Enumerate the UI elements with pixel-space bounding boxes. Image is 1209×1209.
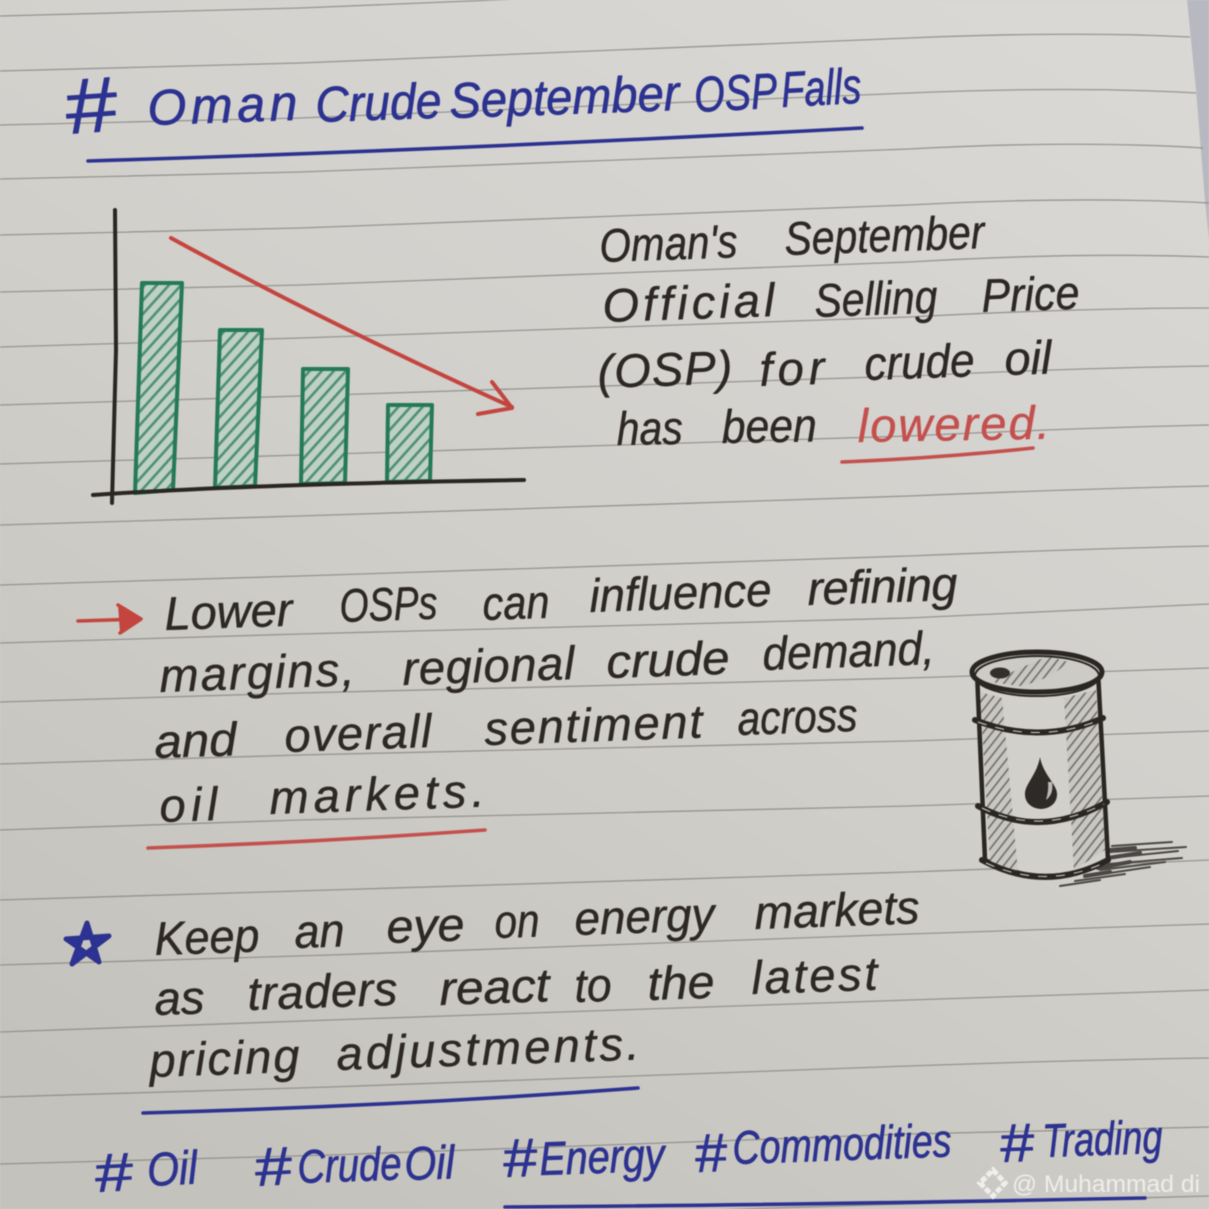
red underline: oil markets [148, 830, 485, 848]
blue underline: pricing adjustments [143, 1088, 638, 1113]
text block: OSP lowered: (OSP) [596, 340, 733, 398]
hashtags: # [501, 1128, 538, 1189]
hashtags: # [693, 1123, 728, 1184]
text block: keep an eye: to [573, 958, 612, 1012]
title: Oman [146, 75, 298, 136]
bar chart: falling price [93, 210, 524, 503]
text block: OSP lowered: been [721, 398, 817, 453]
text block: OSP lowered: Selling [813, 270, 938, 327]
title: OSP [693, 63, 779, 123]
text block: OSP lowered [596, 205, 1080, 455]
text block: OSP lowered: oil [1003, 330, 1054, 385]
barrel shadow [1060, 842, 1186, 886]
text block: keep an eye: on [493, 893, 540, 948]
text block: market influence: across [736, 688, 858, 745]
bar 3 [301, 369, 348, 484]
bar 1 [135, 283, 182, 493]
text block: market influence: crude [605, 631, 730, 688]
trend arrow [171, 238, 512, 414]
text block: keep an eye: energy [573, 887, 718, 945]
text block: keep an eye: pricing [147, 1029, 300, 1087]
hashtags: # [998, 1113, 1035, 1174]
text block: keep an eye: traders [246, 962, 398, 1020]
text block: keep an eye: the [646, 955, 715, 1010]
hashtags: # [92, 1142, 135, 1204]
text block: OSP lowered: Official [601, 273, 777, 332]
text block: keep an eye: eye [385, 897, 465, 953]
text block: market influence: margins, [158, 642, 355, 702]
text block: keep an eye: an [293, 903, 345, 958]
blue underline: hashtags [505, 1198, 1145, 1207]
oil drop [1025, 757, 1057, 809]
hashtags: Trading [1041, 1110, 1163, 1167]
text block: market influence: overall [283, 704, 434, 762]
hashtags: Oil [146, 1140, 200, 1196]
axes [93, 210, 524, 503]
text block: OSP lowered: for [758, 341, 828, 396]
text block: market influence: and [153, 712, 239, 768]
text block: keep an eye: as [153, 970, 205, 1025]
text block: market influence: OSPs [338, 576, 438, 632]
hashtags: Commodities [731, 1113, 952, 1174]
text block: OSP lowered: September [783, 205, 987, 265]
hashtags: # [252, 1136, 294, 1198]
text block: OSP lowered: has [616, 401, 683, 455]
barrel bands [975, 718, 1108, 877]
text block: market influence: markets. [268, 764, 485, 824]
text block: market influence: Lower [163, 582, 296, 640]
bar 2 [215, 330, 262, 488]
text block: market influence [153, 557, 958, 832]
icon: watermark diamond [980, 1170, 1005, 1196]
bar 4 [387, 405, 432, 482]
text block: keep an eye: Keep [153, 908, 260, 965]
barrel hatching [980, 690, 1105, 872]
text block: market influence: demand, [761, 621, 935, 680]
red underline: lowered [842, 448, 1033, 462]
hashtags: Oil [403, 1135, 457, 1190]
watermark: @ Muhammad di [1012, 1171, 1200, 1198]
barrel body [977, 672, 1108, 876]
hashtags: Energy [538, 1128, 667, 1185]
icon: blue star [66, 923, 109, 964]
text block: OSP lowered: lowered. [857, 396, 1050, 452]
text block: OSP lowered: Oman's [598, 214, 738, 272]
text block: market influence: regional [401, 636, 577, 695]
text block: market influence: oil [158, 777, 220, 832]
title [61, 58, 862, 151]
text block: market influence: refining [806, 557, 958, 615]
text block: keep an eye: adjustments. [335, 1016, 640, 1080]
text block: keep an eye: markets [753, 880, 920, 939]
text block: keep an eye [147, 880, 920, 1087]
hashtags: Crude [296, 1136, 402, 1193]
title: Falls [780, 58, 862, 118]
text block: OSP lowered: Price [980, 266, 1080, 322]
title: September [448, 65, 682, 129]
text block: market influence: can [481, 575, 550, 630]
text block: market influence: sentiment [483, 694, 705, 755]
text block: keep an eye: latest [750, 947, 880, 1004]
barrel top [972, 652, 1102, 692]
title underline [88, 128, 862, 161]
text block: keep an eye: react [438, 958, 552, 1015]
icon: red arrow bullet [78, 605, 141, 633]
text block: market influence: influence [588, 563, 772, 622]
icon: oil barrel [972, 652, 1186, 886]
hashtags [92, 1110, 1163, 1204]
title: Crude [314, 73, 442, 133]
text block: OSP lowered: crude [863, 333, 975, 390]
title: # [61, 59, 121, 151]
